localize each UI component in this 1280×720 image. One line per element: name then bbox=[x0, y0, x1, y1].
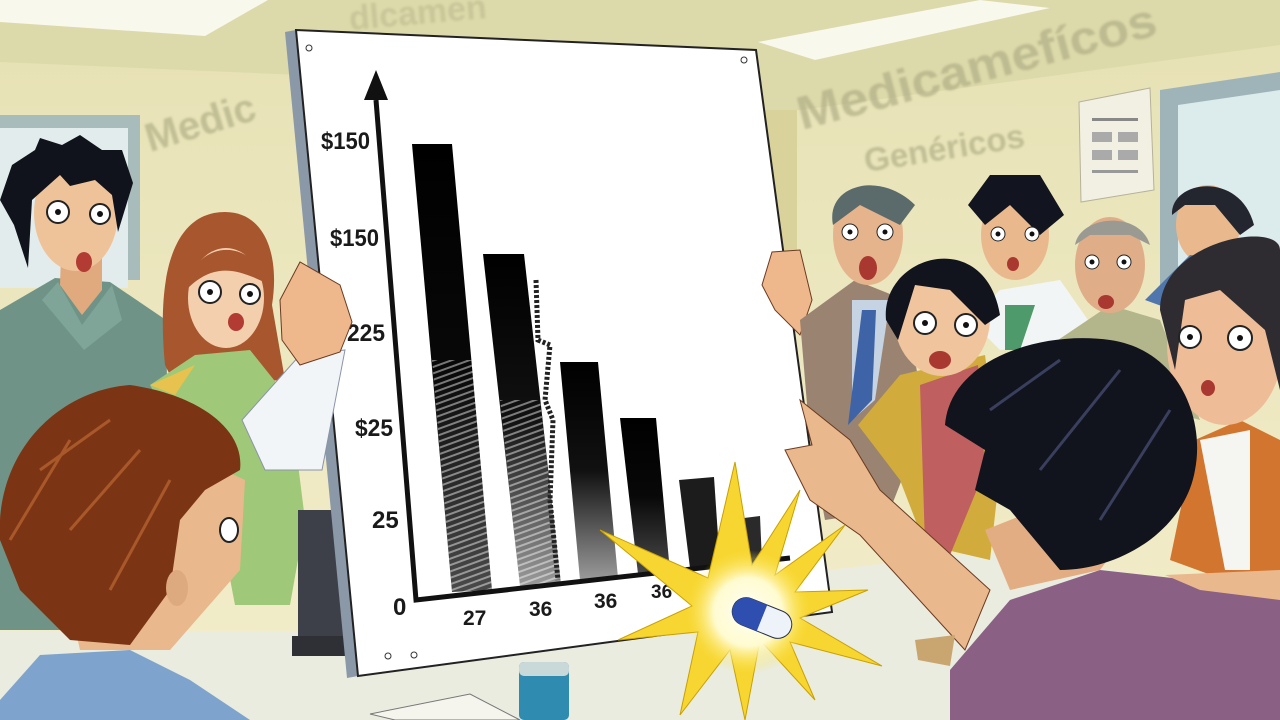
table bbox=[0, 550, 1280, 720]
axis labels: 25 bbox=[372, 507, 399, 534]
bald man bbox=[1058, 305, 1200, 420]
hand on board right bbox=[762, 250, 812, 335]
axis labels: 36 bbox=[529, 598, 552, 621]
person at far right bbox=[1170, 420, 1280, 600]
man in white coat bbox=[970, 280, 1095, 350]
axis labels: 225 bbox=[347, 320, 385, 347]
wooden block bbox=[915, 635, 955, 666]
person: foreground man with dark hair pointing bbox=[785, 338, 1280, 720]
person: brown-haired man in foreground bbox=[0, 385, 250, 720]
wall text: Medic bbox=[140, 85, 261, 161]
person: woman with red hair bbox=[150, 212, 305, 605]
wall text: Genéricos bbox=[861, 117, 1027, 179]
axis labels bbox=[321, 128, 672, 630]
person: left man in green shirt bbox=[0, 135, 168, 630]
bar chart bbox=[364, 70, 790, 600]
wall text: Medicamefícos bbox=[791, 0, 1162, 140]
axis labels: 0 bbox=[393, 594, 406, 621]
wall text bbox=[140, 0, 1162, 179]
monitor stand bbox=[292, 510, 362, 656]
axis labels: 27 bbox=[463, 607, 486, 630]
axis labels: $25 bbox=[355, 415, 393, 442]
chart board bbox=[285, 30, 832, 678]
wall poster bbox=[1079, 88, 1154, 202]
man in brown blazer bbox=[800, 280, 925, 520]
starburst with pill bbox=[600, 462, 882, 720]
papers on table bbox=[370, 694, 520, 720]
axis labels: 36 bbox=[594, 590, 617, 613]
man top right bbox=[1176, 185, 1240, 265]
group of people right bbox=[800, 175, 1280, 600]
man in yellow jacket bbox=[858, 355, 1000, 560]
person: doctor's arm holding board bbox=[242, 262, 352, 470]
axis labels: 36 bbox=[651, 582, 672, 603]
axis labels: $150 bbox=[330, 225, 379, 252]
bottle on table bbox=[519, 662, 569, 720]
axis labels: $150 bbox=[321, 128, 370, 155]
